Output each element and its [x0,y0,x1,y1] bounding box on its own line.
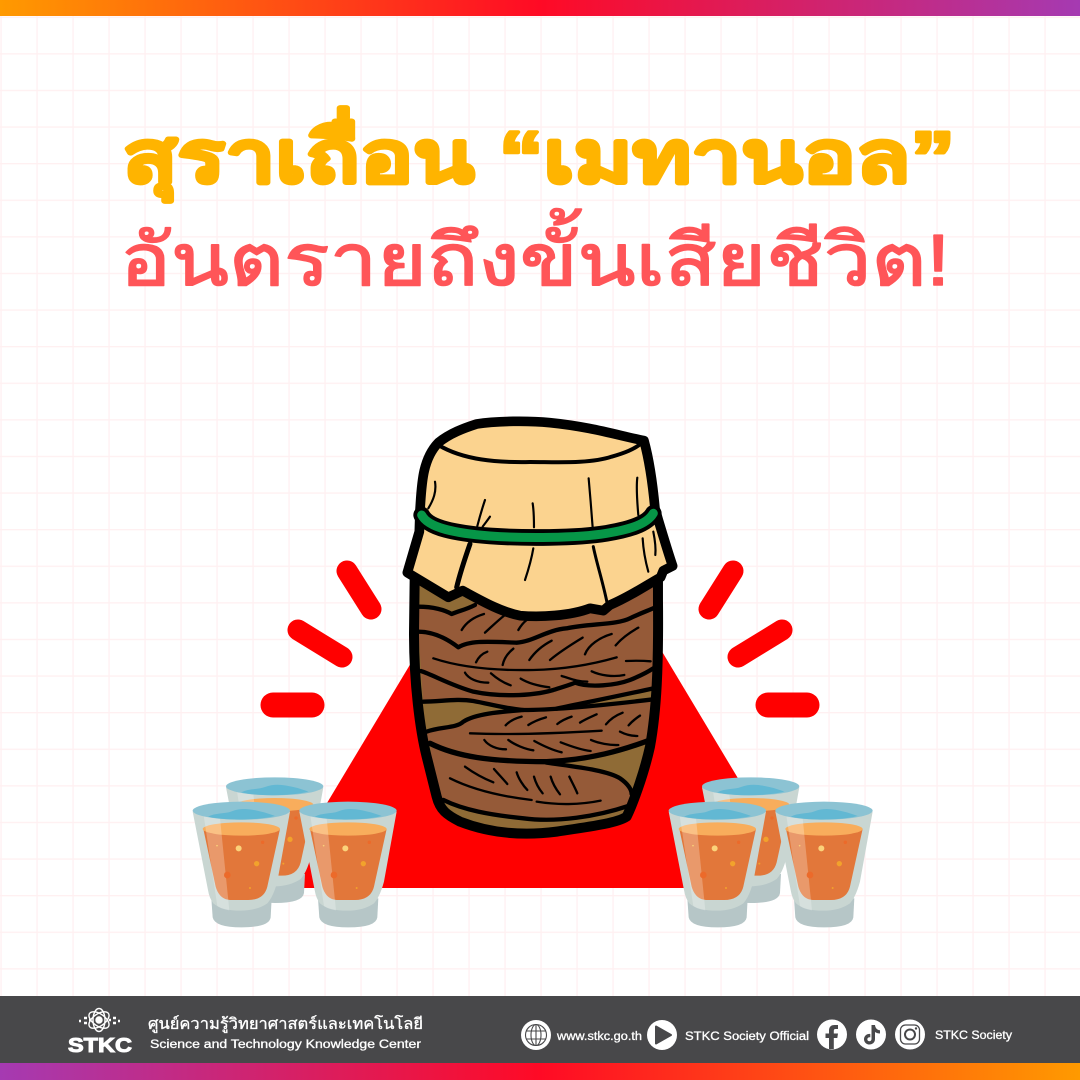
jar body [414,580,658,834]
jar outline [414,580,658,834]
bottom gradient bar [0,1063,1080,1080]
organisation name [148,1015,423,1051]
youtube link [647,1020,809,1050]
title line 1: สุราเถื่อน “เมทานอล” [123,106,955,203]
logo atom mark [79,1008,120,1032]
website link [521,1020,642,1050]
English name: Science and Technology Knowledge Center [150,1039,421,1051]
social text: STKC Society [935,1030,1012,1042]
green band [422,513,653,537]
glasses: right group [669,777,873,927]
cloth cover [407,421,673,616]
footer band [0,996,1080,1063]
alert rays [273,571,807,705]
logo wordmark: STKC [68,1035,132,1057]
icon: globe [521,1020,551,1050]
Thai name: ศูนย์ความรู้วิทยาศาสตร์และเทคโนโลยี [148,1015,423,1034]
band lines [418,605,657,820]
icon: facebook [817,1020,847,1050]
icon: instagram [895,1020,925,1050]
glasses: left group [193,777,397,927]
social links [817,1020,1012,1050]
title line 2: อันตรายถึงขั้นเสียชีวิต! [120,208,950,301]
icon: play [647,1020,677,1050]
youtube text: STKC Society Official [685,1031,809,1043]
top gradient bar [0,0,1080,16]
icon: tiktok [856,1020,886,1050]
STKC logo [68,1008,132,1057]
red warning triangle [276,448,745,888]
website text: www.stkc.go.th [556,1031,642,1043]
fermentation jar [407,421,673,834]
title [120,106,955,301]
feather strokes [433,614,651,804]
